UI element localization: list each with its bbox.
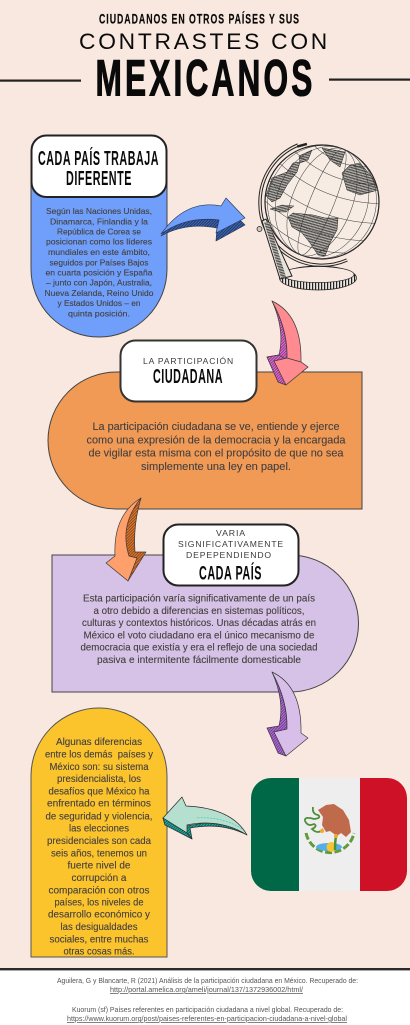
panel: diferencias con México: Algunas diferencias [56, 737, 142, 748]
panel: cada país trabaja diferente: República de Corea se [57, 226, 141, 236]
label: la participación ciudadana: LA PARTICIPACIÓN [143, 356, 234, 366]
panel: varía significativamente: México el voto ciudadano era el único mecanismo de [84, 630, 315, 641]
arrow: pink tip over orange [267, 355, 308, 385]
panel: diferencias con México: enfrentado en términos [47, 799, 151, 810]
label: cada país: VARIA [216, 528, 246, 538]
panel: varía significativamente: a otro debido a diferencias en sistemas políticos, [94, 606, 304, 617]
panel: diferencias con México: de seguridad y violencia, [46, 811, 152, 822]
footer: references: Aguilera, G y Blancarte, R (2021) Análisis de la participación ciudadana en México. Recuperado de: [57, 976, 358, 985]
panel: varía significativamente: pasiva e intermitente fácilmente domesticable [97, 655, 301, 666]
panel: diferencias con México: las elecciones [69, 824, 129, 835]
label: cada país: SIGNIFICATIVAMENTE [178, 539, 284, 549]
panel: diferencias con México: sociales, entre muchas [50, 934, 148, 945]
lake and cactus [316, 829, 342, 852]
panel: diferencias con México: México son: su sistema [50, 762, 149, 773]
arrow: purple [267, 672, 308, 756]
icon: globe [256, 142, 380, 290]
panel: varía significativamente: Esta participación varía significativamente de un país [83, 594, 315, 605]
label: la participación ciudadana: CIUDADANA [153, 366, 223, 388]
panel: diferencias con México: entre los demás países y [45, 749, 154, 760]
panel: cada país trabaja diferente: y Estados Unidos – en [58, 298, 141, 308]
panel: cada país trabaja diferente: seguidos por Países Bajos [50, 257, 148, 267]
eagle [318, 804, 351, 837]
panel: la participación ciudadana [48, 372, 362, 509]
panel: diferencias con México: otras cosas más. [64, 947, 134, 958]
panel: diferencias con México: países, los niveles de [54, 897, 144, 908]
panel: diferencias con México: desafíos que México ha [48, 786, 150, 797]
panel: diferencias con México: las desigualdades [60, 922, 138, 933]
panel: la participación ciudadana: simplemente una ley en papel. [141, 461, 291, 473]
panel: cada país trabaja diferente: CADA PAÍS TRABAJA [38, 147, 159, 170]
panel: diferencias con México [31, 708, 167, 958]
panel: diferencias con México: presidenciales son cada [47, 836, 151, 847]
panel: diferencias con México: comparación con otros [48, 885, 150, 896]
arrow: orange [106, 498, 146, 581]
panel: diferencias con México: fuerte nivel de [68, 861, 131, 872]
panel: cada país trabaja diferente [31, 136, 167, 337]
snake [305, 807, 323, 832]
panel: cada país trabaja diferente: – junto con Japón, Australia, [46, 278, 152, 288]
label: cada país [164, 524, 298, 586]
panel: cada país trabaja diferente: posicionan como los líderes [46, 237, 152, 247]
title: CIUDADANOS EN OTROS PAÍSES Y SUS [99, 12, 300, 26]
panel: cada país trabaja diferente: mundiales en este ámbito, [48, 247, 150, 257]
footer: references: https://www.kuorum.org/post/paises-referentes-en-participacion-ciudadana-a-nivel-global [67, 1014, 347, 1023]
footer: references: http://portal.amelica.org/ameli/journal/137/1372936002/html/ [110, 985, 304, 994]
arrow: blue [161, 198, 245, 241]
panel: diferencias con México: corrupción a [72, 873, 127, 884]
label: cada país: CADA PAÍS [199, 562, 262, 584]
title: CONTRASTES CON [79, 29, 330, 54]
title [0, 12, 410, 106]
footer: references [0, 968, 410, 1025]
arrow: pink [267, 301, 308, 385]
panel: cada país trabaja diferente: Dinamarca, Finlandia y la [50, 216, 148, 226]
panel: la participación ciudadana: La participación ciudadana se ve, entiende y ejerce [92, 421, 340, 433]
panel: la participación ciudadana: como una expresión de la democracia y la encargada [86, 434, 346, 446]
label: cada país: DEPEPENDIENDO [186, 550, 272, 560]
label: la participación ciudadana [120, 340, 256, 402]
panel: cada país trabaja diferente: Nueva Zelanda, Reino Unido [44, 288, 154, 298]
panel: cada país trabaja diferente: Según las Naciones Unidas, [46, 206, 152, 216]
panel: varía significativamente: democracia que existía y era el reflejo de una sociedad [80, 643, 318, 654]
panel: varía significativamente [52, 555, 358, 692]
panel: diferencias con México: desarrollo económico y [48, 910, 151, 921]
panel: cada país trabaja diferente: DIFERENTE [66, 168, 132, 190]
panel: varía significativamente: culturas y contextos históricos. Unas décadas atrás en [82, 618, 316, 629]
wreath [306, 833, 354, 853]
icon: Mexican flag [251, 778, 407, 891]
panel: cada país trabaja diferente: quinta posición. [68, 308, 130, 318]
panel: cada país trabaja diferente: en cuarta posición y España [46, 267, 153, 277]
panel: diferencias con México: presidencialista, los [57, 774, 141, 785]
panel: diferencias con México: seis años, tenemos un [51, 848, 147, 859]
arrow: teal [163, 797, 247, 839]
footer: references: Kuorum (sf) Países referentes en participación ciudadana a nivel global. Recuperado de: [72, 1005, 343, 1014]
panel: la participación ciudadana: de vigilar esta misma con el propósito de que no sea [88, 448, 344, 460]
